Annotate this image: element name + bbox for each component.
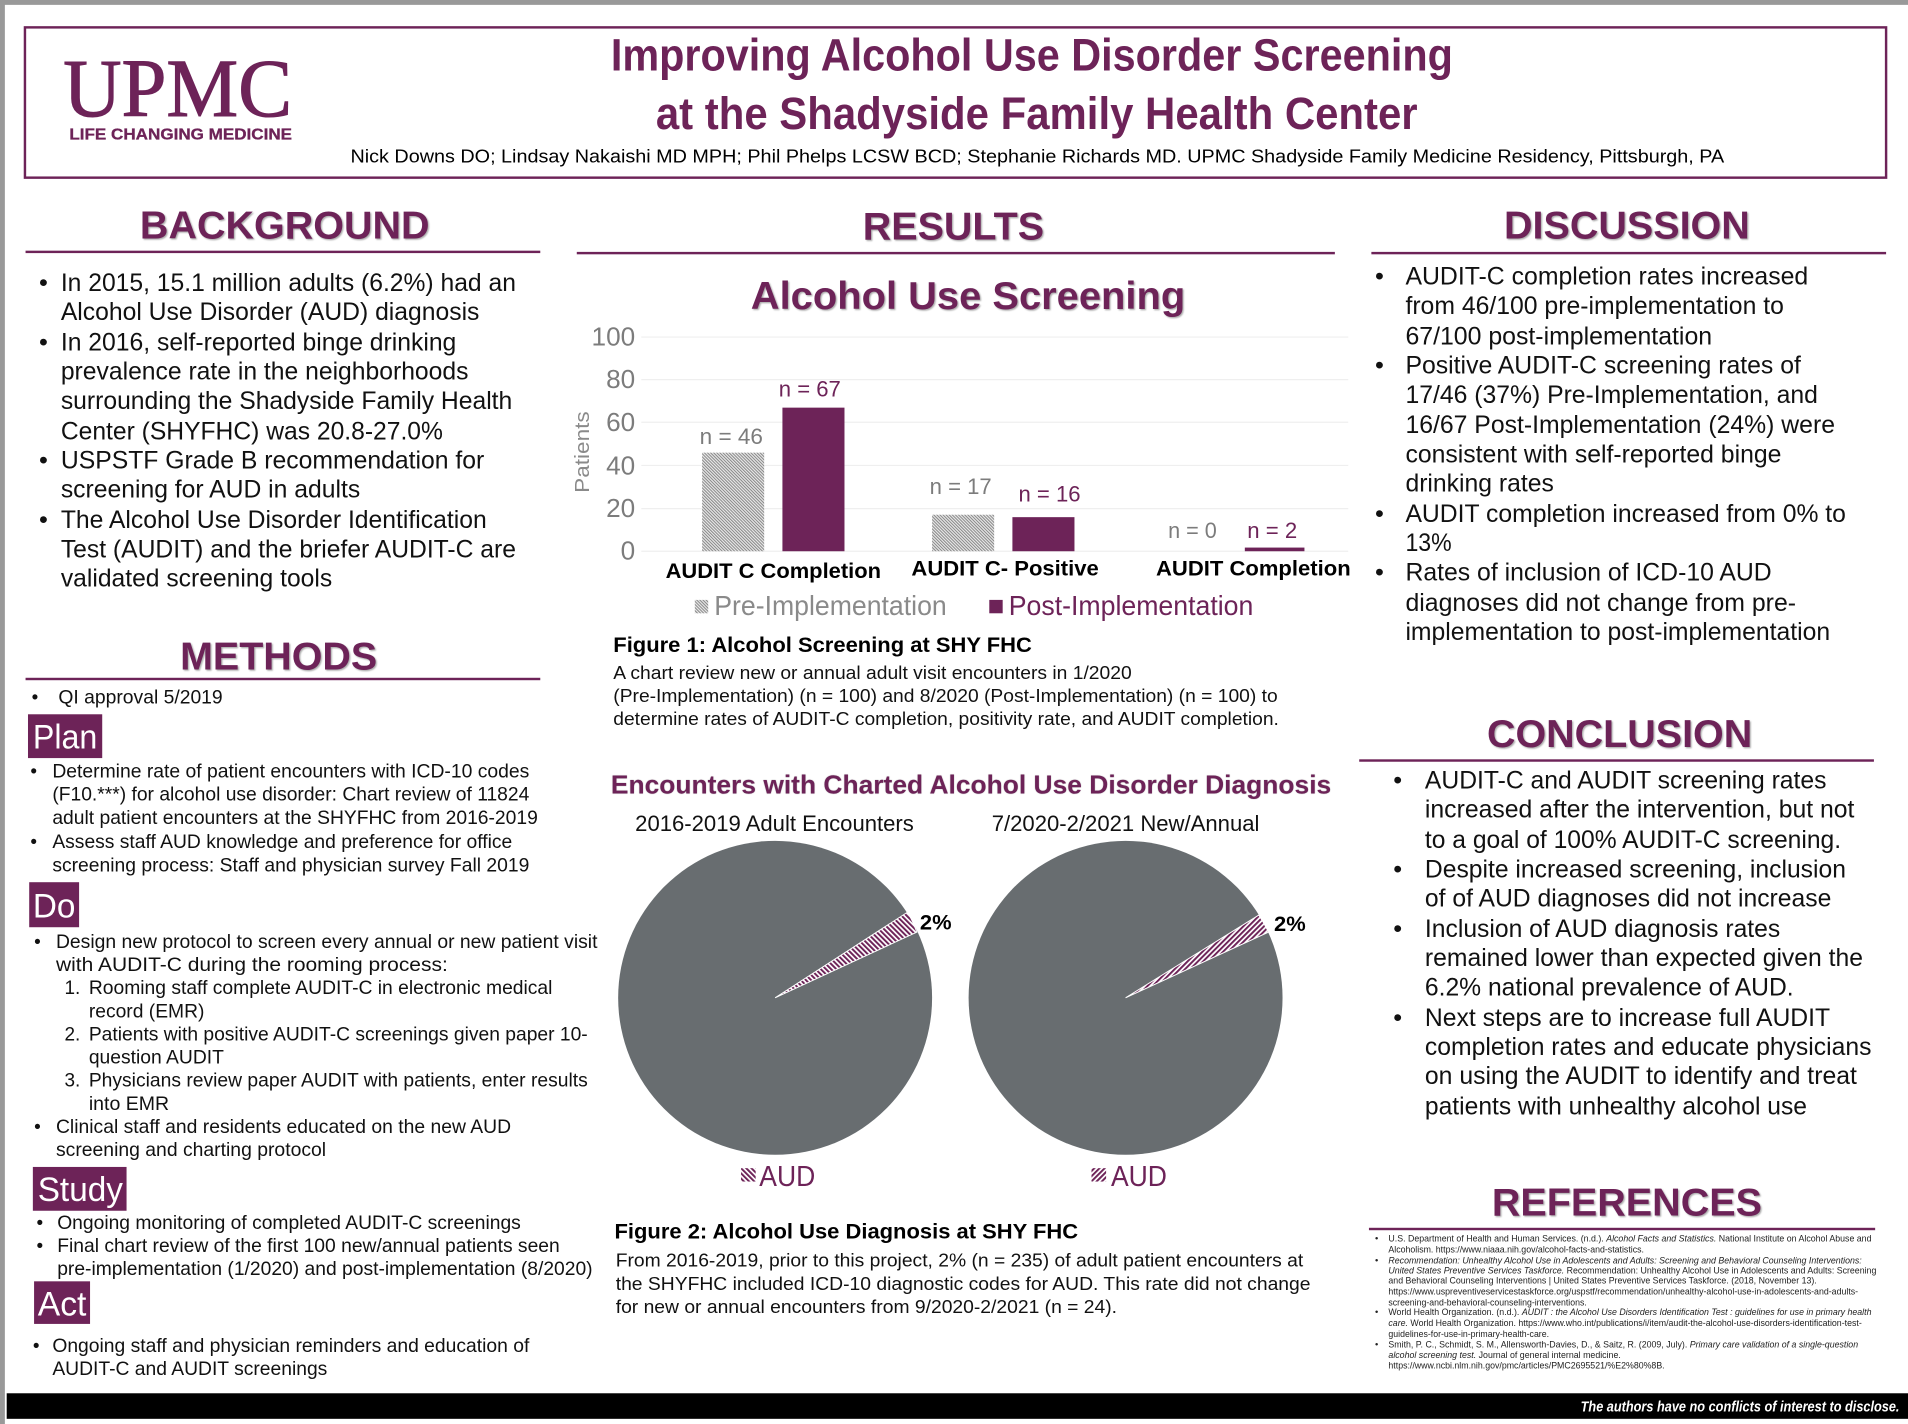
conclusion bullet list: •	[1393, 1004, 1402, 1032]
y axis: 60	[606, 407, 635, 437]
do steps: Rooming staff complete AUDIT-C in electronic medical	[89, 978, 552, 999]
heading: methods: METHODS	[180, 635, 377, 678]
title	[611, 30, 1453, 139]
do steps: 3.	[64, 1071, 80, 1092]
plan steps	[30, 762, 538, 876]
y axis: 80	[606, 364, 635, 394]
QI approval: •	[32, 687, 38, 708]
background bullet list: •	[39, 506, 48, 534]
act steps: Ongoing staff and physician reminders and education of	[52, 1336, 530, 1357]
y axis	[571, 322, 635, 566]
discussion bullet list	[1375, 263, 1846, 646]
pie chart: 2016-2019	[618, 811, 952, 1193]
conclusion bullet list: of of AUD diagnoses did not increase	[1425, 885, 1831, 913]
do steps: screening and charting protocol	[56, 1140, 326, 1161]
discussion bullet list: diagnoses did not change from pre-	[1405, 589, 1796, 617]
reference list: Smith, P. C., Schmidt, S. M., Allensworth-Davies, D., & Saitz, R. (2009, July). Primary care validation of a single-question	[1388, 1339, 1858, 1349]
study label: Study	[38, 1171, 123, 1209]
do steps	[34, 932, 598, 1161]
reference list: •	[1375, 1255, 1378, 1265]
figure 1 caption: A chart review new or annual adult visit encounters in 1/2020	[613, 662, 1132, 683]
pie chart: 2020-2021: 2%	[1274, 912, 1306, 936]
do steps: Clinical staff and residents educated on the new AUD	[56, 1117, 511, 1138]
figure 2 caption: the SHYFHC included ICD-10 diagnostic codes for AUD. This rate did not change	[616, 1273, 1311, 1294]
do steps: •	[34, 1117, 41, 1138]
conclusion bullet list: Next steps are to increase full AUDIT	[1425, 1004, 1830, 1032]
discussion bullet list: •	[1375, 558, 1384, 586]
discussion bullet list: AUDIT-C completion rates increased	[1405, 263, 1808, 291]
reference list: Recommendation: Unhealthy Alcohol Use in Adolescents and Adults: Screening and Behavioral Counseling Interventions:	[1388, 1255, 1862, 1265]
reference list: https://www.ncbi.nlm.nih.gov/pmc/articles/PMC2695521/%E2%80%8B.	[1388, 1361, 1665, 1371]
do steps: •	[34, 932, 41, 953]
do steps: record (EMR)	[89, 1001, 204, 1022]
conclusion bullet list: Inclusion of AUD diagnosis rates	[1425, 915, 1780, 943]
pie chart: 2016-2019: 2%	[920, 911, 952, 935]
background bullet list: prevalence rate in the neighborhoods	[61, 358, 468, 386]
data labels: n = 46	[700, 424, 763, 449]
panel: results	[571, 206, 1351, 1317]
discussion bullet list: •	[1375, 500, 1384, 528]
data labels: n = 2	[1247, 518, 1297, 543]
legend: Pre-Implementation	[714, 590, 947, 621]
act label: Act	[38, 1285, 87, 1323]
discussion bullet list: consistent with self-reported binge	[1405, 440, 1781, 468]
background bullet list: In 2015, 15.1 million adults (6.2%) had an	[61, 269, 516, 297]
plan steps: screening process: Staff and physician survey Fall 2019	[52, 855, 529, 876]
study steps: Final chart review of the first 100 new/annual patients seen	[57, 1236, 560, 1257]
chart title: Alcohol Use Screening	[751, 275, 1185, 318]
do steps: 2.	[64, 1024, 80, 1045]
figure 1 caption: Figure 1: Alcohol Screening at SHY FHC	[613, 633, 1032, 657]
study steps: •	[37, 1236, 43, 1257]
act steps	[33, 1336, 530, 1380]
background bullet list: validated screening tools	[61, 565, 332, 593]
plan label: Plan	[33, 718, 97, 756]
conclusion bullet list: completion rates and educate physicians	[1425, 1033, 1871, 1061]
data labels: n = 17	[930, 474, 992, 499]
panel: conclusion	[1359, 713, 1874, 1121]
y axis: 20	[606, 493, 635, 523]
data labels: n = 67	[779, 377, 841, 402]
heading: background: BACKGROUND	[140, 204, 430, 247]
figure 2 caption: for new or annual encounters from 9/2020-2/2021 (n = 24).	[616, 1296, 1117, 1317]
figure 1 caption: (Pre-Implementation) (n = 100) and 8/2020 (Post-Implementation) (n = 100) to	[613, 685, 1278, 706]
conclusion bullet list: to a goal of 100% AUDIT-C screening.	[1425, 826, 1841, 854]
y axis: Patients	[571, 411, 594, 493]
background bullet list: •	[39, 269, 48, 297]
study steps: •	[37, 1213, 43, 1234]
legend	[695, 590, 1253, 621]
do steps: 1.	[64, 978, 80, 999]
reference list: guidelines-for-use-in-primary-health-care.	[1388, 1329, 1549, 1339]
discussion bullet list: drinking rates	[1405, 470, 1554, 498]
plan steps: adult patient encounters at the SHYFHC from 2016-2019	[52, 808, 538, 829]
background bullet list: screening for AUD in adults	[61, 476, 360, 504]
do steps: into EMR	[89, 1094, 169, 1115]
background bullet list: Alcohol Use Disorder (AUD) diagnosis	[61, 298, 479, 326]
background bullet list: Center (SHYFHC) was 20.8-27.0%	[61, 417, 443, 445]
y axis: 100	[592, 322, 635, 352]
plan steps: •	[30, 762, 37, 783]
conclusion bullet list: AUDIT-C and AUDIT screening rates	[1425, 767, 1826, 795]
background bullet list: surrounding the Shadyside Family Health	[61, 387, 512, 415]
heading: results: RESULTS	[863, 206, 1044, 249]
background bullet list: The Alcohol Use Disorder Identification	[61, 506, 487, 534]
authors: Nick Downs DO; Lindsay Nakaishi MD MPH; Phil Phelps LCSW BCD; Stephanie Richards MD. UPMC Shadyside Family Medicine Residency, Pittsburgh, PA	[350, 145, 1725, 166]
title: at the Shadyside Family Health Center	[656, 88, 1418, 139]
bars	[702, 408, 1304, 551]
conclusion bullet list: •	[1393, 767, 1402, 795]
conclusion bullet list: •	[1393, 855, 1402, 883]
figure 1 caption	[613, 633, 1279, 729]
logo: UPMC: UPMC	[63, 42, 292, 134]
discussion bullet list: 17/46 (37%) Pre-Implementation, and	[1405, 381, 1818, 409]
background bullet list	[39, 269, 516, 593]
reference list: U.S. Department of Health and Human Services. (n.d.). Alcohol Facts and Statistics. National Institute on Alcohol Abuse and	[1388, 1233, 1871, 1243]
do steps: Physicians review paper AUDIT with patients, enter results	[89, 1071, 588, 1092]
plan steps: (F10.***) for alcohol use disorder: Chart review of 11824	[52, 785, 529, 806]
panel: methods	[26, 635, 598, 1380]
reference list: alcohol screening test. Journal of general internal medicine.	[1388, 1350, 1621, 1360]
panel: references	[1369, 1182, 1876, 1371]
conclusion bullet list: •	[1393, 915, 1402, 943]
study steps: Ongoing monitoring of completed AUDIT-C screenings	[57, 1213, 521, 1234]
conclusion bullet list	[1393, 767, 1871, 1121]
act steps: •	[33, 1336, 40, 1357]
discussion bullet list: Positive AUDIT-C screening rates of	[1405, 352, 1802, 380]
heading: references: REFERENCES	[1492, 1182, 1762, 1225]
discussion bullet list: •	[1375, 352, 1384, 380]
panel: background	[26, 204, 540, 593]
data labels: n = 0	[1168, 518, 1217, 543]
reference list: •	[1375, 1339, 1378, 1349]
heading: conclusion: CONCLUSION	[1487, 713, 1752, 756]
background bullet list: Test (AUDIT) and the briefer AUDIT-C are	[61, 535, 516, 563]
plan steps: Assess staff AUD knowledge and preference for office	[52, 832, 512, 853]
legend: Post-Implementation	[1009, 590, 1253, 621]
reference list: screening-and-behavioral-counseling-interventions.	[1388, 1297, 1587, 1307]
pie chart: 2020-2021	[969, 811, 1306, 1193]
reference list	[1375, 1233, 1876, 1371]
background bullet list: In 2016, self-reported binge drinking	[61, 328, 456, 356]
data labels	[700, 377, 1297, 543]
footer bar: conflicts disclosure	[7, 1393, 1908, 1419]
background bullet list: •	[39, 446, 48, 474]
conclusion bullet list: increased after the intervention, but not	[1425, 796, 1854, 824]
category labels: AUDIT C- Positive	[911, 557, 1099, 581]
background bullet list: USPSTF Grade B recommendation for	[61, 446, 484, 474]
conclusion bullet list: remained lower than expected given the	[1425, 944, 1863, 972]
pie chart: 2016-2019: 2016-2019 Adult Encounters	[635, 811, 914, 836]
pie charts heading: Encounters with Charted Alcohol Use Disorder Diagnosis	[611, 769, 1331, 799]
reference list: care. World Health Organization. https://www.who.int/publications/i/item/audit-the-alcohol-use-disorders-identification-test-	[1388, 1318, 1862, 1328]
do steps: Patients with positive AUDIT-C screenings given paper 10-	[89, 1024, 588, 1045]
plan steps: •	[30, 832, 37, 853]
QI approval: QI approval 5/2019	[58, 687, 223, 708]
y axis: 0	[621, 536, 635, 566]
y axis: 40	[606, 451, 635, 481]
reference list: United States Preventive Services Taskforce. Recommendation: Unhealthy Alcohol Use in Adolescents and Adults: Screening	[1388, 1266, 1876, 1276]
category labels	[666, 557, 1351, 583]
study steps: pre-implementation (1/2020) and post-implementation (8/2020)	[57, 1259, 593, 1280]
conclusion bullet list: patients with unhealthy alcohol use	[1425, 1093, 1807, 1121]
reference list: World Health Organization. (n.d.). AUDIT : the Alcohol Use Disorders Identification Test : guidelines for use in primary health	[1388, 1307, 1871, 1317]
do steps: with AUDIT-C during the rooming process:	[55, 955, 448, 976]
pie chart: 2020-2021: AUD	[1111, 1161, 1167, 1193]
title: Improving Alcohol Use Disorder Screening	[611, 30, 1453, 81]
do label: Do	[33, 887, 75, 925]
reference list: https://www.uspreventiveservicestaskforce.org/uspstf/recommendation/unhealthy-alcohol-use-in-adolescents-and-adults-	[1388, 1286, 1858, 1296]
plan steps: Determine rate of patient encounters with ICD-10 codes	[52, 762, 529, 783]
logo: UPMC: LIFE CHANGING MEDICINE	[69, 126, 292, 143]
bar chart: alcohol use screening	[571, 275, 1351, 621]
data labels: n = 16	[1018, 481, 1081, 506]
panel: discussion	[1371, 204, 1886, 646]
reference list: Alcoholism. https://www.niaaa.nih.gov/alcohol-facts-and-statistics.	[1388, 1244, 1644, 1254]
do steps: Design new protocol to screen every annual or new patient visit	[56, 932, 598, 953]
figure 1 caption: determine rates of AUDIT-C completion, positivity rate, and AUDIT completion.	[613, 708, 1279, 729]
pie chart: 2020-2021: 7/2020-2/2021 New/Annual	[992, 811, 1259, 836]
conclusion bullet list: on using the AUDIT to identify and treat	[1425, 1062, 1857, 1090]
reference list: and Behavioral Counseling Interventions | United States Preventive Services Taskforce. (2018, November 13).	[1388, 1275, 1817, 1285]
category labels: AUDIT C Completion	[666, 559, 881, 583]
reference list: •	[1375, 1307, 1378, 1317]
figure 2 caption: Figure 2: Alcohol Use Diagnosis at SHY FHC	[615, 1220, 1078, 1244]
header banner	[25, 27, 1886, 178]
figure 2 caption	[615, 1220, 1311, 1317]
discussion bullet list: •	[1375, 263, 1384, 291]
category labels: AUDIT Completion	[1156, 557, 1351, 581]
discussion bullet list: AUDIT completion increased from 0% to	[1405, 500, 1846, 528]
discussion bullet list: 16/67 Post-Implementation (24%) were	[1405, 411, 1835, 439]
study steps	[37, 1213, 593, 1280]
figure 2 caption: From 2016-2019, prior to this project, 2% (n = 235) of adult patient encounters at	[616, 1250, 1304, 1271]
reference list: •	[1375, 1233, 1378, 1243]
act steps: AUDIT-C and AUDIT screenings	[52, 1359, 327, 1380]
conclusion bullet list: 6.2% national prevalence of AUD.	[1425, 973, 1794, 1001]
discussion bullet list: 13%	[1405, 529, 1452, 557]
discussion bullet list: Rates of inclusion of ICD-10 AUD	[1405, 558, 1772, 586]
heading: discussion: DISCUSSION	[1504, 204, 1750, 247]
conclusion bullet list: Despite increased screening, inclusion	[1425, 855, 1846, 883]
do steps: question AUDIT	[89, 1048, 224, 1069]
background bullet list: •	[39, 328, 48, 356]
pie chart: 2016-2019: AUD	[759, 1161, 815, 1193]
discussion bullet list: 67/100 post-implementation	[1405, 322, 1712, 350]
discussion bullet list: implementation to post-implementation	[1405, 618, 1830, 646]
discussion bullet list: from 46/100 pre-implementation to	[1405, 292, 1784, 320]
